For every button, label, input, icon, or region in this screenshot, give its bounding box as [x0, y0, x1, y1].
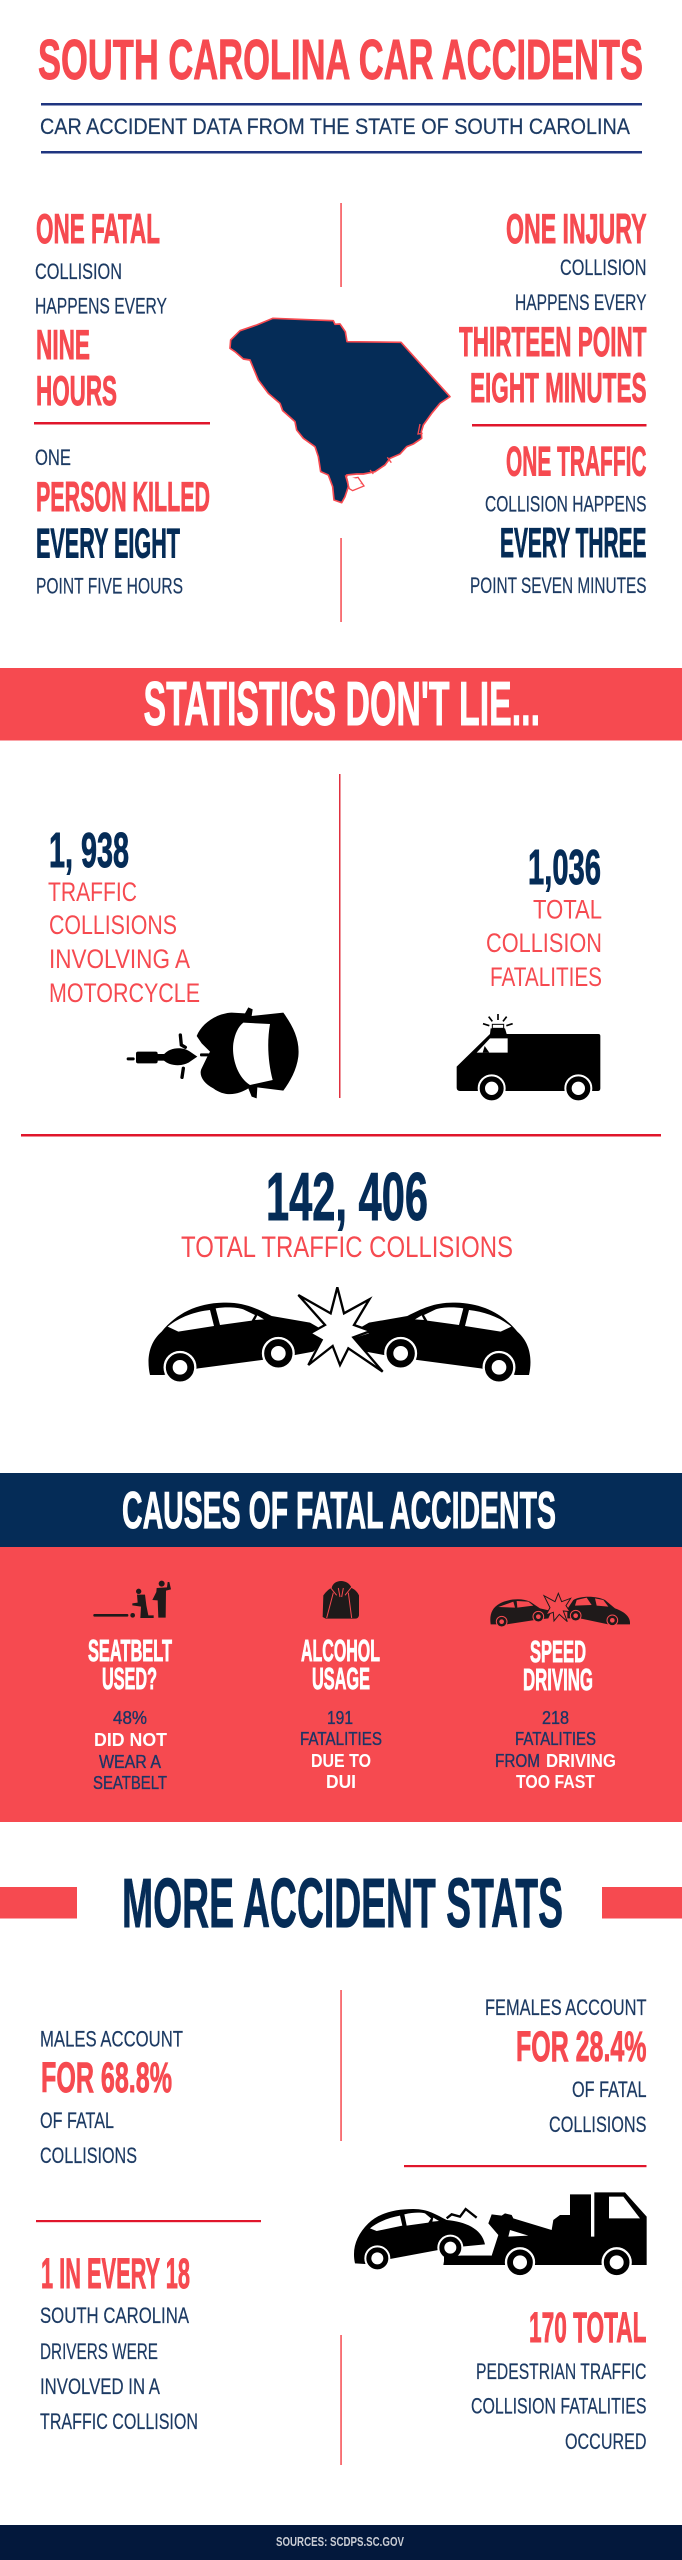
header — [38, 28, 643, 154]
column: speed: DRIVING — [523, 1662, 593, 1697]
column: seatbelt — [88, 1633, 172, 1793]
stat: total fatalities: TOTAL — [533, 895, 602, 925]
column: seatbelt: WEAR A — [99, 1752, 161, 1772]
column: alcohol: DUE TO — [311, 1751, 371, 1771]
stat: total fatalities: FATALITIES — [490, 962, 602, 992]
stat: motorcycle collisions: INVOLVING A — [49, 944, 190, 974]
stat: motorcycle collisions: TRAFFIC — [48, 877, 137, 907]
stat: total traffic collisions: 142, 406 — [266, 1159, 428, 1235]
column: speed: DRIVING — [546, 1751, 616, 1771]
stat: motorcycle collisions: 1, 938 — [49, 824, 129, 878]
icon: emergency van — [457, 1014, 600, 1101]
column: seatbelt: DID NOT — [94, 1730, 167, 1750]
stat: males: COLLISIONS — [40, 2143, 137, 2168]
icon: two cars crashing — [149, 1287, 530, 1383]
text block: one person killed: EVERY EIGHT — [36, 520, 180, 566]
stat: 1 in every 18: 1 IN EVERY 18 — [41, 2250, 190, 2298]
stat: 170 total: OCCURED — [565, 2429, 646, 2454]
column: speed: FATALITIES — [515, 1729, 596, 1749]
stat: 170 total — [471, 2304, 646, 2454]
icon: person with head in hands — [323, 1581, 359, 1619]
stat: total fatalities: 1,036 — [528, 841, 601, 895]
column: speed: 218 — [542, 1708, 569, 1728]
column: speed: TOO FAST — [516, 1772, 595, 1792]
icon: motorcycle and car — [127, 1007, 299, 1098]
text block: one injury collision: COLLISION — [560, 255, 646, 280]
stat: 1 in every 18 — [40, 2250, 198, 2434]
stat: females — [485, 1995, 647, 2137]
stat: males — [40, 2027, 183, 2168]
stat: males: OF FATAL — [40, 2108, 114, 2133]
column: seatbelt: USED? — [102, 1661, 157, 1696]
stat: total fatalities: COLLISION — [486, 928, 602, 958]
column: seatbelt: SEATBELT — [88, 1633, 172, 1668]
text block: one person killed: ONE — [35, 445, 71, 470]
text block: one person killed — [35, 445, 210, 598]
stat: motorcycle collisions: COLLISIONS — [49, 910, 177, 940]
text block: one injury collision — [459, 205, 647, 411]
column: seatbelt: 48% — [113, 1708, 147, 1728]
text block: one fatal collision: HAPPENS EVERY — [35, 294, 167, 318]
panel: statistics — [21, 774, 661, 1383]
stat: females: OF FATAL — [572, 2077, 646, 2102]
stat: 1 in every 18: SOUTH CAROLINA — [40, 2303, 189, 2328]
text block: one person killed: POINT FIVE HOURS — [36, 574, 183, 598]
column: alcohol: 191 — [327, 1708, 353, 1728]
stat: total fatalities — [486, 841, 602, 992]
footer — [0, 2525, 682, 2560]
stat: 1 in every 18: TRAFFIC COLLISION — [40, 2409, 198, 2434]
stat: motorcycle collisions: MOTORCYCLE — [49, 978, 200, 1008]
icon: tow truck and car — [354, 2192, 647, 2276]
stat: total traffic collisions: TOTAL TRAFFIC COLLISIONS — [181, 1231, 513, 1264]
icon: small car crash — [490, 1593, 630, 1627]
text block: one traffic collision — [470, 438, 646, 598]
column: seatbelt: SEATBELT — [93, 1773, 167, 1793]
column: alcohol: FATALITIES — [300, 1729, 382, 1749]
icon: South Carolina map — [230, 318, 450, 503]
column: alcohol — [300, 1633, 382, 1792]
column: alcohol: ALCOHOL — [301, 1633, 380, 1668]
column: alcohol: USAGE — [312, 1661, 370, 1696]
footer: SOURCES: SCDPS.SC.GOV — [276, 2535, 405, 2549]
column: speed — [495, 1634, 616, 1792]
column: alcohol: DUI — [326, 1772, 356, 1792]
panel: causes of fatal accidents — [0, 1473, 682, 1822]
panel: more stats — [36, 1990, 647, 2465]
stat: total traffic collisions — [181, 1159, 513, 1264]
column: speed: FROM — [495, 1751, 540, 1771]
stat: motorcycle collisions — [48, 824, 200, 1008]
stat: females: COLLISIONS — [549, 2112, 646, 2137]
stat: 1 in every 18: DRIVERS WERE — [40, 2339, 158, 2364]
text block: one fatal collision: ONE FATAL — [36, 205, 160, 252]
text block: one fatal collision — [35, 205, 167, 414]
panel: collision frequency — [34, 203, 647, 622]
stat: males: MALES ACCOUNT — [40, 2027, 183, 2052]
text block: one fatal collision: COLLISION — [35, 259, 122, 284]
text block: one person killed: PERSON KILLED — [36, 473, 210, 520]
column: speed: SPEED — [530, 1634, 586, 1669]
text block: one fatal collision: HOURS — [36, 367, 117, 414]
icon: first aid scene — [93, 1581, 171, 1618]
stat: males: FOR 68.8% — [41, 2054, 172, 2102]
text block: one fatal collision: NINE — [36, 321, 90, 368]
stat: 1 in every 18: INVOLVED IN A — [40, 2374, 160, 2399]
